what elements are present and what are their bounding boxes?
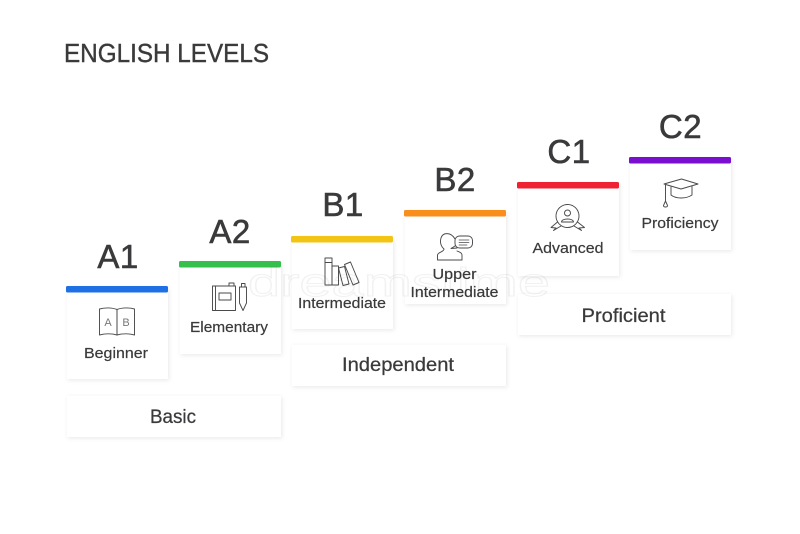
panel: A1 Beginner <box>66 238 168 379</box>
level heading: A1: A1 <box>97 238 139 275</box>
level heading: C2: C2 <box>659 108 702 145</box>
panel: C2 Proficiency <box>629 108 731 250</box>
label: Upper Intermediate: Upper <box>432 266 476 283</box>
panel: B2 Upper Intermediate: Intermediate <box>410 284 498 301</box>
panel: A2 Elementary <box>179 213 281 354</box>
panel: C1 Advanced <box>517 133 619 276</box>
panel: B1 Intermediate <box>291 186 393 329</box>
label: Proficiency: Proficiency <box>642 215 719 232</box>
watermark: dreamstime <box>248 261 550 305</box>
panel: B2 Upper Intermediate <box>404 161 506 304</box>
icon: open book: A <box>104 317 112 329</box>
icon: books <box>325 258 359 286</box>
group: Proficient <box>518 294 731 335</box>
level heading: C1: C1 <box>547 133 591 170</box>
label: Beginner: Beginner <box>84 345 148 362</box>
icon: graduation cap <box>664 179 698 207</box>
group: Proficient: Proficient <box>582 305 666 327</box>
group: Basic <box>67 396 281 437</box>
icon: person with speech bubble <box>438 234 472 260</box>
label: Advanced: Advanced <box>532 240 604 257</box>
level heading: B1: B1 <box>322 186 364 223</box>
icon: open book: B <box>122 317 130 329</box>
title: ENGLISH LEVELS <box>64 38 269 68</box>
label: Intermediate: Intermediate <box>298 295 386 312</box>
level heading: A2: A2 <box>209 213 251 250</box>
group: Independent <box>292 345 506 386</box>
group: Basic: Basic <box>150 406 196 428</box>
label: Elementary: Elementary <box>190 319 269 336</box>
icon: open book <box>100 308 134 335</box>
level heading: B2: B2 <box>434 161 476 198</box>
icon: notebook and pen <box>212 283 246 310</box>
icon: award rosette <box>551 204 584 230</box>
group: Independent: Independent <box>342 354 455 376</box>
